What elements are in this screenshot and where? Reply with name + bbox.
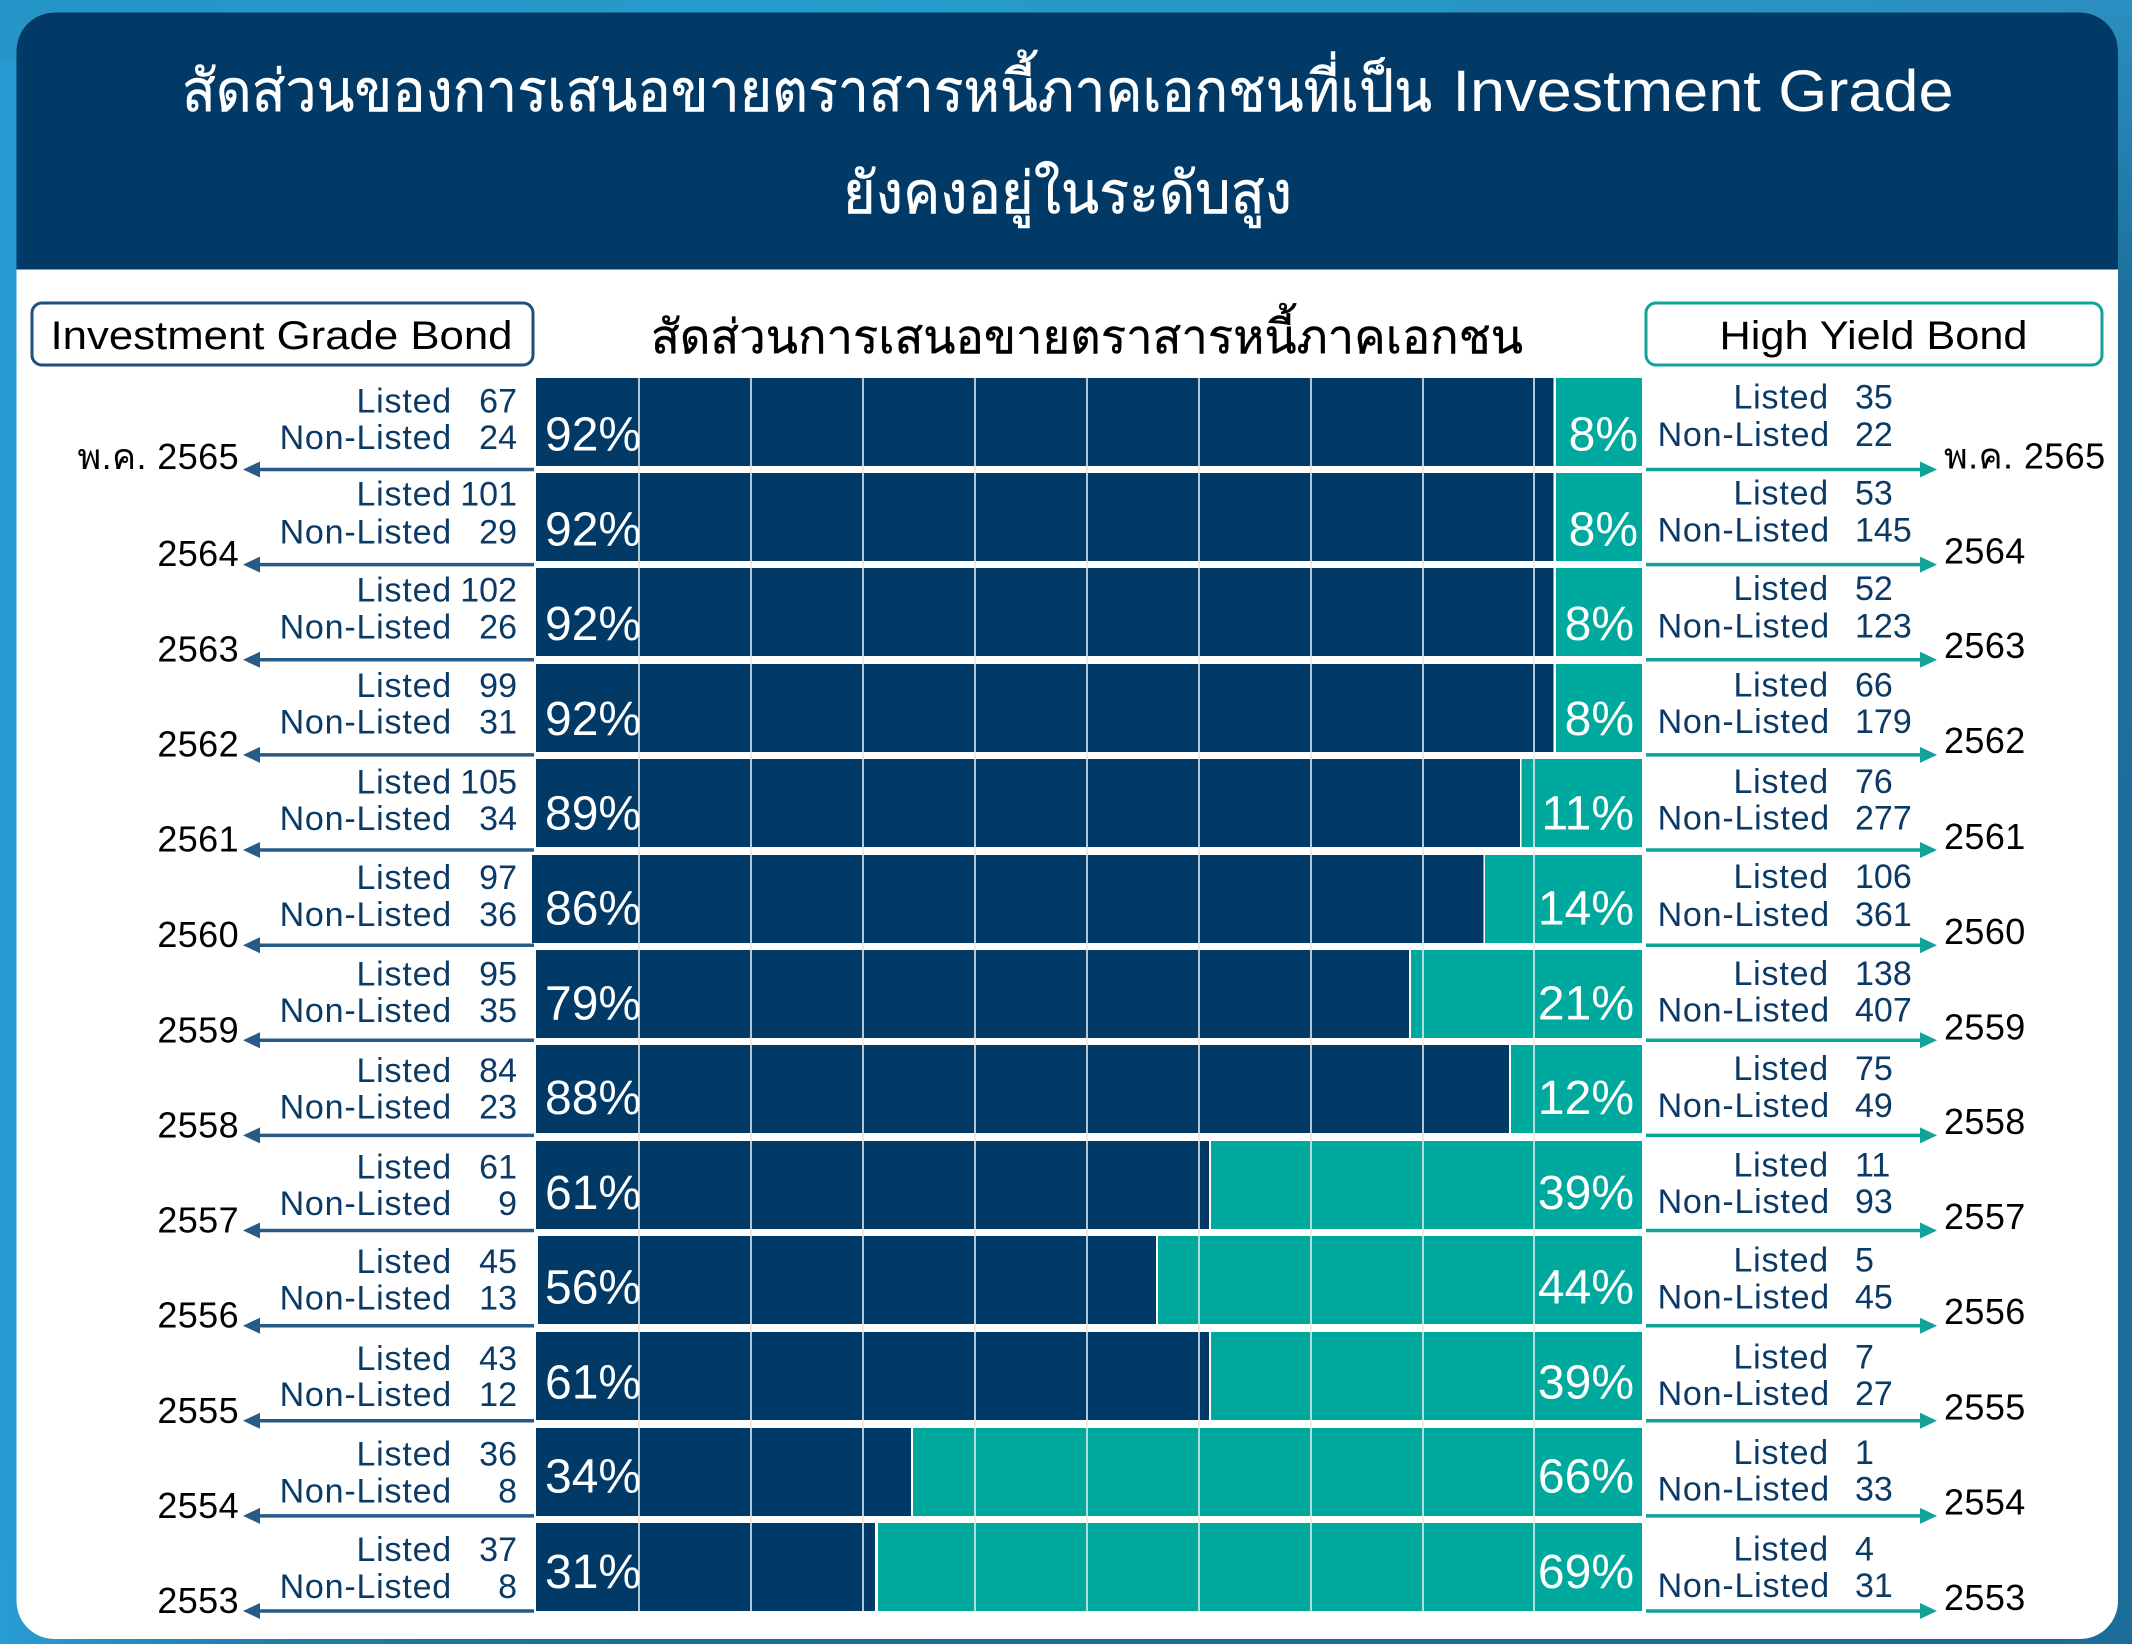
row 2559 left: 35 — [479, 992, 517, 1030]
row 2553 right — [1646, 1531, 2026, 1619]
percent labels: high yield: 39% — [1538, 1167, 1634, 1220]
panel: title banner — [16, 12, 2118, 270]
label: High Yield Bond: High Yield Bond — [1720, 314, 2028, 358]
row 2556 left: Non-Listed — [280, 1280, 452, 1318]
row 2554 right: 2554 — [1944, 1482, 2026, 1522]
percent labels: investment grade: 61% — [545, 1356, 641, 1410]
bars: 2559 — [536, 950, 1642, 1038]
bars: 2564 — [536, 473, 1642, 561]
row 2555 left — [157, 1340, 534, 1431]
row 2561 right — [1646, 763, 2026, 858]
row 2557 left: 61 — [479, 1148, 517, 1186]
row 2563 left: 2563 — [157, 628, 239, 669]
row 2556 left: 13 — [479, 1280, 517, 1318]
row 2561 left: Listed — [356, 764, 452, 802]
row 2558 right: Listed — [1733, 1050, 1829, 1088]
row 2557 right: 93 — [1855, 1183, 1893, 1221]
row พ.ค. 2565 right: Non-Listed — [1658, 416, 1830, 454]
row 2561 left: 2561 — [157, 818, 239, 860]
row 2557 right: Listed — [1733, 1146, 1829, 1184]
percent labels: high yield: 8% — [1569, 408, 1638, 462]
bars: 2557 — [536, 1141, 1642, 1229]
row 2556 left: 45 — [479, 1243, 517, 1281]
row 2553 left: 8 — [498, 1568, 517, 1606]
row 2560 right: Listed — [1733, 858, 1829, 896]
row 2563 right: 2563 — [1944, 625, 2026, 666]
row 2562 left: 31 — [479, 704, 517, 742]
row 2555 left: Non-Listed — [280, 1376, 452, 1414]
stacked bar chart — [532, 378, 1642, 1611]
row 2557 left: Non-Listed — [280, 1185, 452, 1223]
row 2553 left — [157, 1531, 534, 1621]
bars: 2563 — [536, 568, 1642, 656]
row 2556 right: 2556 — [1944, 1291, 2026, 1332]
title: สัดส่วนของการเสนอขายตราสารหนี้ภาคเอกชนที่เป็น — [182, 50, 1432, 124]
row 2556 right — [1646, 1242, 2026, 1334]
row 2561 right: Listed — [1733, 763, 1829, 801]
row 2554 left: Listed — [356, 1436, 452, 1474]
row 2564 left: 2564 — [157, 533, 239, 574]
percent labels: high yield: 39% — [1538, 1356, 1634, 1410]
percent labels: investment grade: 92% — [545, 693, 641, 746]
row 2563 right: Non-Listed — [1658, 608, 1830, 646]
row 2560 left: Non-Listed — [280, 896, 452, 934]
row 2555 left: 12 — [479, 1376, 517, 1414]
title: ยังคงอยู่ในระดับสูง — [843, 160, 1292, 228]
row 2564 right: Non-Listed — [1658, 512, 1830, 550]
row 2558 right: 2558 — [1944, 1101, 2026, 1142]
row 2555 right — [1646, 1338, 2026, 1429]
percent labels: high yield: 21% — [1538, 977, 1634, 1030]
row 2559 left: 2559 — [157, 1009, 239, 1050]
row 2562 left — [157, 667, 534, 764]
row 2553 right: 2553 — [1944, 1577, 2026, 1618]
row 2554 left: Non-Listed — [280, 1472, 452, 1510]
percent labels: investment grade: 79% — [545, 977, 641, 1030]
row 2562 right: Non-Listed — [1658, 703, 1830, 741]
row 2556 left: 2556 — [157, 1295, 239, 1336]
bars: 2553 — [536, 1523, 1642, 1611]
percent labels: investment grade: 31% — [545, 1546, 641, 1599]
row พ.ค. 2565 left: Listed — [356, 383, 452, 421]
percent labels: investment grade: 61% — [545, 1167, 641, 1220]
row 2559 right: 2559 — [1944, 1006, 2026, 1047]
row 2562 left: Non-Listed — [280, 704, 452, 742]
row 2559 right: 138 — [1855, 955, 1912, 993]
row 2553 right: Non-Listed — [1658, 1567, 1830, 1605]
label: Investment Grade Bond — [32, 303, 533, 365]
row 2563 right — [1646, 570, 2026, 668]
row 2560 right: Non-Listed — [1658, 896, 1830, 934]
row 2559 left: Non-Listed — [280, 992, 452, 1030]
row 2556 left: Listed — [356, 1243, 452, 1281]
row 2556 right: Listed — [1733, 1242, 1829, 1280]
row 2563 right: 52 — [1855, 570, 1893, 608]
percent labels: investment grade: 92% — [545, 503, 641, 556]
row พ.ค. 2565 right: 22 — [1855, 416, 1893, 454]
bars: 2554 — [536, 1428, 1642, 1516]
percent labels: investment grade: 86% — [545, 882, 641, 936]
row 2563 left: Listed — [356, 572, 452, 610]
row 2555 left: 2555 — [157, 1390, 239, 1431]
row 2558 left: Listed — [356, 1052, 452, 1090]
percent labels: investment grade — [545, 408, 641, 1599]
row 2564 left — [157, 476, 534, 574]
row 2564 left: 101 — [460, 476, 517, 514]
row 2557 right: Non-Listed — [1658, 1183, 1830, 1221]
row 2557 left: 2557 — [157, 1200, 239, 1240]
row 2563 left: Non-Listed — [280, 608, 452, 646]
row 2562 right — [1646, 666, 2026, 763]
row 2556 left — [157, 1243, 534, 1336]
row 2555 right: Non-Listed — [1658, 1375, 1830, 1413]
row 2561 right: 76 — [1855, 763, 1893, 801]
row 2563 left: 26 — [479, 608, 517, 646]
row 2554 right: Listed — [1733, 1434, 1829, 1472]
percent labels: investment grade: 92% — [545, 408, 641, 462]
row พ.ค. 2565 left: 24 — [479, 419, 517, 457]
row พ.ค. 2565 left: Non-Listed — [280, 419, 452, 457]
row 2558 left: 84 — [479, 1052, 517, 1090]
row 2554 right: 1 — [1855, 1434, 1874, 1472]
row 2563 left: 102 — [460, 572, 517, 610]
row พ.ค. 2565 left: 67 — [479, 383, 517, 421]
bars: 2562 — [536, 664, 1642, 752]
row 2558 left — [157, 1052, 534, 1145]
row 2557 right: 11 — [1855, 1146, 1890, 1184]
bars: 2558 — [536, 1045, 1642, 1133]
row 2558 right: Non-Listed — [1658, 1087, 1830, 1125]
percent labels: investment grade: 88% — [545, 1072, 641, 1125]
row พ.ค. 2565 right — [1646, 378, 2106, 478]
row พ.ค. 2565 right: พ.ค. 2565 — [1944, 436, 2106, 476]
row 2560 right: 106 — [1855, 858, 1912, 896]
row 2558 left: 2558 — [157, 1104, 239, 1145]
row 2563 right: Listed — [1733, 570, 1829, 608]
percent labels: investment grade: 92% — [545, 598, 641, 651]
row 2560 left: Listed — [356, 859, 452, 897]
row 2560 left: 36 — [479, 896, 517, 934]
row 2564 left: 29 — [479, 513, 517, 551]
row พ.ค. 2565 left: พ.ค. 2565 — [77, 436, 239, 477]
row พ.ค. 2565 right: 35 — [1855, 378, 1893, 416]
bars: 2555 — [536, 1332, 1642, 1420]
label: Investment Grade Bond: Investment Grade Bond — [50, 314, 512, 358]
row 2561 right: Non-Listed — [1658, 800, 1830, 838]
row 2561 right: 277 — [1855, 800, 1912, 838]
row 2558 left: Non-Listed — [280, 1088, 452, 1126]
bars: พ.ค. 2565 — [536, 378, 1642, 466]
row 2560 right: 361 — [1855, 896, 1912, 934]
row 2554 left: 8 — [498, 1472, 517, 1510]
percent labels: high yield — [1538, 408, 1638, 1599]
bars: 2560 — [532, 855, 1642, 943]
left column: investment grade counts — [77, 383, 534, 1621]
row 2558 right: 75 — [1855, 1050, 1893, 1088]
row พ.ค. 2565 left — [77, 383, 534, 478]
percent labels: high yield: 66% — [1538, 1450, 1634, 1504]
row 2564 right: 145 — [1855, 512, 1912, 550]
row 2564 left: Non-Listed — [280, 513, 452, 551]
percent labels: investment grade: 56% — [545, 1262, 641, 1315]
row 2553 left: 37 — [479, 1531, 517, 1569]
row 2562 right: 66 — [1855, 666, 1893, 704]
row 2557 left: 9 — [498, 1185, 517, 1223]
row 2553 right: 31 — [1855, 1567, 1893, 1605]
row 2557 left — [157, 1148, 534, 1240]
row 2561 left: 34 — [479, 800, 517, 838]
row 2561 right: 2561 — [1944, 816, 2026, 857]
row 2553 left: Listed — [356, 1531, 452, 1569]
row 2559 right — [1646, 955, 2026, 1048]
row 2555 right: 7 — [1855, 1338, 1874, 1376]
row 2560 left: 97 — [479, 859, 517, 897]
label: High Yield Bond — [1646, 303, 2102, 365]
row 2560 left — [157, 859, 534, 955]
percent labels: high yield: 8% — [1565, 598, 1634, 651]
row 2556 right: 45 — [1855, 1278, 1893, 1316]
row 2560 right — [1646, 858, 2026, 953]
row 2563 left — [157, 572, 534, 669]
row 2557 right — [1646, 1146, 2026, 1238]
percent labels: investment grade: 34% — [545, 1450, 641, 1504]
percent labels: high yield: 8% — [1569, 503, 1638, 556]
row 2553 left: 2553 — [157, 1580, 239, 1621]
row 2560 left: 2560 — [157, 914, 239, 955]
row พ.ค. 2565 right: Listed — [1733, 378, 1829, 416]
row 2562 right: Listed — [1733, 666, 1829, 704]
row 2559 right: 407 — [1855, 992, 1912, 1030]
row 2555 left: 43 — [479, 1340, 517, 1378]
row 2563 right: 123 — [1855, 608, 1912, 646]
percent labels: high yield: 12% — [1538, 1072, 1634, 1125]
row 2562 left: 99 — [479, 667, 517, 705]
percent labels: investment grade: 89% — [545, 788, 641, 841]
row 2564 right: 53 — [1855, 474, 1893, 512]
row 2555 left: Listed — [356, 1340, 452, 1378]
row 2554 right: Non-Listed — [1658, 1471, 1830, 1509]
row 2556 right: 5 — [1855, 1242, 1874, 1280]
row 2564 right: Listed — [1733, 474, 1829, 512]
title: Investment Grade — [1452, 59, 1954, 124]
row 2562 left: Listed — [356, 667, 452, 705]
row 2561 left: 105 — [460, 764, 517, 802]
row 2554 left: 36 — [479, 1436, 517, 1474]
row 2564 right: 2564 — [1944, 530, 2026, 571]
row 2556 right: Non-Listed — [1658, 1278, 1830, 1316]
bars: 2561 — [536, 759, 1642, 847]
row 2559 right: Listed — [1733, 955, 1829, 993]
percent labels: high yield: 11% — [1541, 788, 1634, 841]
right column: high yield counts — [1646, 378, 2106, 1619]
percent labels: high yield: 69% — [1538, 1546, 1634, 1599]
row 2554 right: 33 — [1855, 1471, 1893, 1509]
row 2557 right: 2557 — [1944, 1196, 2026, 1237]
row 2555 right: 2555 — [1944, 1386, 2026, 1428]
row 2561 left — [157, 764, 534, 860]
row 2554 left: 2554 — [157, 1485, 239, 1526]
row 2561 left: Non-Listed — [280, 800, 452, 838]
row 2562 right: 2562 — [1944, 720, 2026, 761]
row 2558 right — [1646, 1050, 2026, 1143]
heading: chart title: สัดส่วนการเสนอขายตราสารหนี้ภาคเอกชน — [651, 303, 1523, 363]
row 2562 left: 2562 — [157, 723, 239, 764]
row 2553 right: Listed — [1733, 1531, 1829, 1569]
row 2555 right: Listed — [1733, 1338, 1829, 1376]
row 2558 left: 23 — [479, 1088, 517, 1126]
row 2555 right: 27 — [1855, 1375, 1893, 1413]
row 2562 right: 179 — [1855, 703, 1912, 741]
percent labels: high yield: 8% — [1565, 693, 1634, 746]
row 2559 left: Listed — [356, 955, 452, 993]
row 2554 left — [157, 1436, 534, 1526]
bars: 2556 — [538, 1236, 1642, 1324]
row 2559 left: 95 — [479, 955, 517, 993]
row 2553 left: Non-Listed — [280, 1568, 452, 1606]
row 2553 right: 4 — [1855, 1531, 1874, 1569]
title — [182, 50, 1954, 228]
row 2564 right — [1646, 474, 2026, 573]
row 2554 right — [1646, 1434, 2026, 1524]
percent labels: high yield: 44% — [1538, 1262, 1634, 1315]
row 2558 right: 49 — [1855, 1087, 1893, 1125]
percent labels: high yield: 14% — [1538, 882, 1634, 936]
row 2560 right: 2560 — [1944, 911, 2026, 952]
row 2559 right: Non-Listed — [1658, 992, 1830, 1030]
row 2559 left — [157, 955, 534, 1050]
row 2564 left: Listed — [356, 476, 452, 514]
row 2557 left: Listed — [356, 1148, 452, 1186]
